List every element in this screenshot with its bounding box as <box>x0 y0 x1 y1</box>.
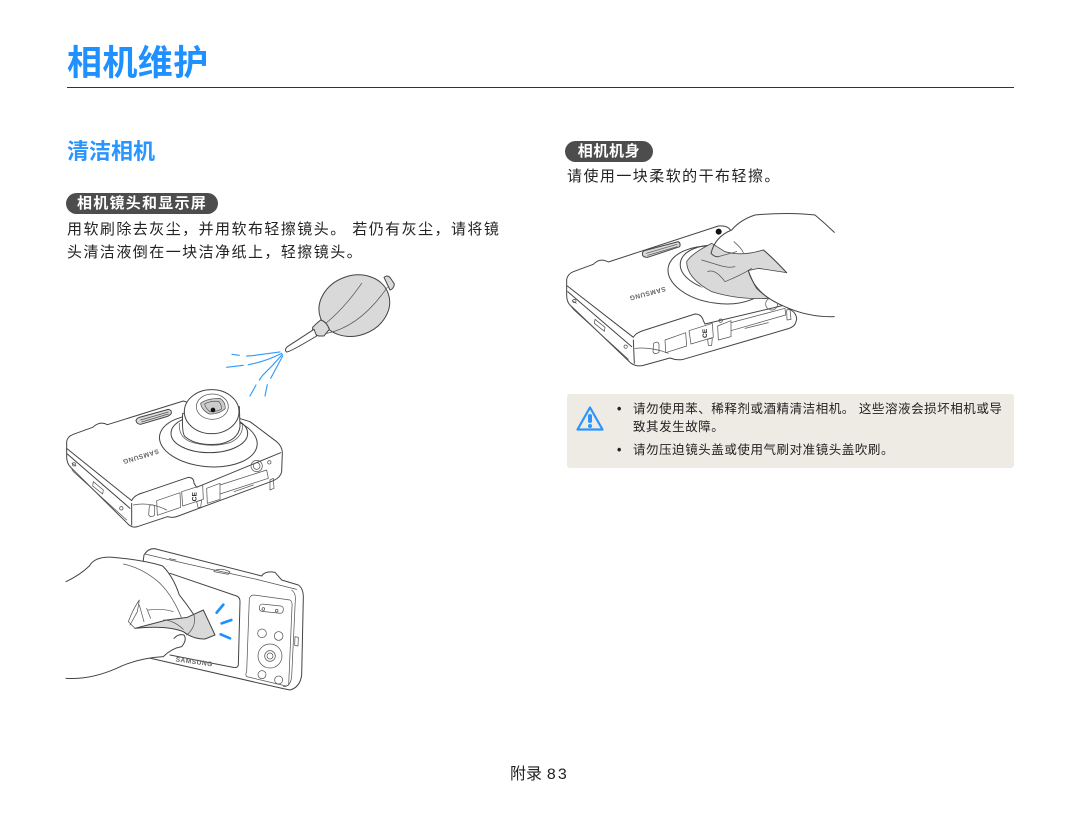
icon: hand with cloth <box>66 557 215 679</box>
icon: camera front with retracted lens: SAMSUNG <box>628 285 666 301</box>
icon: camera front with extended lens: SAMSUNG <box>122 447 159 465</box>
icon: camera front with retracted lens: CE <box>702 328 709 338</box>
panel: warning notice: 致其发生故障。 <box>633 420 724 434</box>
panel: warning notice: • <box>617 402 622 416</box>
icon: warning triangle <box>576 406 604 431</box>
icon: camera back: SAMSUNG <box>175 656 213 669</box>
panel: warning notice: 请勿使用苯、稀释剂或酒精清洁相机。 这些溶液会损坏相机或导 <box>633 402 1002 416</box>
icon: hand with cloth <box>687 213 834 317</box>
text block: lens cleaning instructions: 用软刷除去灰尘，并用软布轻擦镜头。 若仍有灰尘，请将镜 <box>67 221 500 238</box>
pill heading: lens and display <box>66 193 218 214</box>
section heading: cleaning the camera: 清洁相机 <box>67 139 155 164</box>
text block: lens cleaning instructions <box>67 221 500 261</box>
page footer: 附录 83 <box>510 766 569 784</box>
title: 相机维护 <box>67 44 209 83</box>
text block: warning bullets <box>617 402 1002 457</box>
icon: blue air spray <box>227 352 283 396</box>
panel: warning notice: • <box>617 443 622 457</box>
icon: air blower <box>285 265 398 352</box>
text block: lens cleaning instructions: 头清洁液倒在一块洁净纸上，轻擦镜头。 <box>67 244 363 261</box>
text block: body cleaning instruction: 请使用一块柔软的干布轻擦。 <box>567 168 781 185</box>
pill heading: camera body <box>565 141 653 162</box>
icon: camera back <box>143 549 303 690</box>
icon: camera front with retracted lens <box>567 226 797 366</box>
panel: warning notice <box>567 394 1014 468</box>
icon: blue shine marks <box>217 605 231 638</box>
icon: camera front with extended lens <box>67 390 282 527</box>
panel: warning notice: 请勿压迫镜头盖或使用气刷对准镜头盖吹刷。 <box>633 443 894 457</box>
icon: camera front with extended lens: CE <box>192 492 199 501</box>
pill heading: camera body: 相机机身 <box>578 143 640 160</box>
pill heading: lens and display: 相机镜头和显示屏 <box>77 195 207 212</box>
